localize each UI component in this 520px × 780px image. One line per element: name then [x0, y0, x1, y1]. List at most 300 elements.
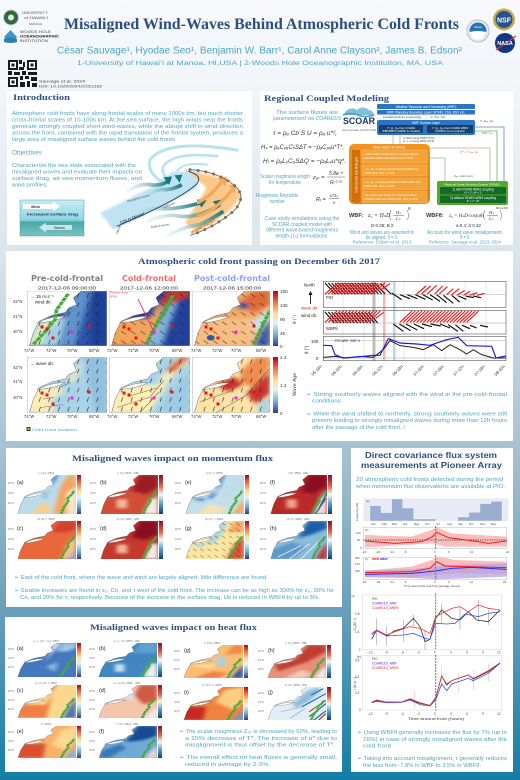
WW3 orange box: Wave Watch III (WW3): [373, 146, 405, 150]
flux chart labels: 0.4: [355, 675, 360, 679]
heat map titles: -T* (%), WBFθ - WBF: [116, 723, 139, 726]
cyclone illustration: Aligned waves: [150, 222, 170, 229]
momentum map ticks: 42°N: [260, 482, 266, 485]
map axis labels: 72°W: [128, 414, 138, 419]
QR code: [8, 60, 37, 87]
bullet text: wind and waves: ➢ While the wind shifted to northerly, strong southerly waves were still: [306, 412, 507, 418]
heat map ticks: 42°N: [89, 731, 95, 734]
logo: NSF: NSF: [497, 18, 512, 24]
intro paragraph: Atmospheric cold fronts have along-frontal scales of many 1000s km, but much shorter: [12, 111, 243, 117]
WRF boxes: [377, 104, 494, 178]
map: e: [186, 475, 244, 514]
WBF equation: B: [408, 206, 411, 211]
WRF boxes: τ*, Qₛ, Qₗₐ from COARE WBFθ: [432, 126, 469, 130]
map axis labels: 68°W: [172, 414, 182, 419]
WBF theta note: Account for wind wave misalignment,: [427, 230, 503, 236]
colorbar: wind-wave angle: 135: [280, 303, 288, 308]
drag chart labels: -12: [368, 650, 373, 654]
map axis labels: 70°W: [231, 414, 241, 419]
cold front count text: when momentum flux observations are available at PIO.: [355, 484, 505, 490]
chart labels: PIO: [326, 295, 334, 300]
colorbar: wave age: Wave Age: [292, 373, 298, 396]
map: heat i: [184, 687, 243, 720]
intro paragraph: across the front, combined with the rapid translation of the frontal system, produces a: [12, 130, 244, 136]
WW3 orange box: Unstructured and Multi-grid: [354, 157, 358, 193]
map axis labels: 68°W: [256, 414, 266, 419]
flux chart labels: -6: [401, 712, 404, 716]
observation points: [40, 324, 256, 406]
heat map ticks: 42°N: [89, 648, 95, 651]
composite axis labels: wave: [379, 557, 388, 561]
wind wave box: Increased surface drag: [27, 212, 78, 216]
drag chart labels: 1.4: [355, 630, 360, 634]
composite axis labels: -18: [376, 550, 380, 554]
composite axis labels: 0: [434, 550, 436, 554]
bullet text: direct flux: ➢ Using WBFθ generally increases the flux by 7% (up to: [357, 730, 507, 736]
WBF note: [350, 230, 414, 244]
drag chart labels: -6: [401, 650, 404, 654]
ROMS green box: dᵀ = 1°; dᵂ = 1°: [464, 190, 482, 194]
objectives heading: Objectives: [12, 150, 42, 156]
chart time axis: 07-18h: [473, 363, 486, 377]
heat map ticks: 40°N: [174, 710, 180, 713]
momentum map ticks: 40°N: [90, 548, 96, 551]
momentum map titles: Uᴅ (ms⁻¹), WBFθ: [205, 518, 224, 521]
pointer: Pioneer Array: [138, 299, 153, 330]
heat map ticks: 41°N: [89, 740, 95, 743]
case study text: length (z₀) formulations:: [276, 234, 329, 240]
heat map ticks: 42°N: [258, 650, 264, 653]
composite axis labels: -12: [390, 580, 394, 584]
map: h: [270, 521, 327, 559]
heading: regional coupled modeling: Regional Coupled Modeling: [264, 94, 390, 103]
composite axis labels: 0: [360, 546, 362, 550]
WBF equation: Hₛ: [395, 210, 401, 215]
flux chart labels: COARE3.5_WBFθ: [372, 666, 399, 670]
map: a: [18, 475, 76, 514]
Reynolds label: [256, 193, 298, 205]
composite axis labels: 0: [434, 580, 436, 584]
column heading: post-cold-frontal: Post-cold-frontal: [194, 274, 270, 283]
chart time axis: 07-12h: [452, 363, 465, 377]
scalar roughness equation: z₀ₜ =: [312, 175, 325, 181]
colorbar: wave age: 1.2: [280, 383, 287, 388]
momentum map ticks: 41°N: [8, 538, 14, 541]
heat map ticks: 40°N: [8, 666, 14, 669]
heat colorbars: [77, 643, 331, 758]
chart labels: WBF θ: [350, 339, 360, 343]
map: heat j: [268, 687, 326, 720]
surface flux intro: parameterized via COARE3.5: [273, 116, 341, 122]
histogram labels: Jan: [371, 522, 376, 526]
map axis labels: 40°N: [13, 395, 22, 400]
WW3 orange box: - Hₛ, wave and angle on z using modified: [364, 193, 417, 197]
chart labels: WBFθ: [326, 326, 338, 331]
composite axis labels: 6: [448, 550, 450, 554]
timestamps: [38, 286, 262, 290]
Reynolds equation: [316, 193, 339, 205]
histogram labels: Mar: [392, 522, 397, 526]
column heading: cold-frontal: Cold-frontal: [122, 274, 176, 283]
WW3 orange box: - Cₚ, Hₛ, z using original Charnly WBF and: [364, 167, 419, 171]
bullet text: heat: ➢ The scalar roughness Z₀ₜ is decreased by 60%, leading to: [179, 729, 337, 735]
heat panel letters: (g): [184, 648, 191, 654]
chart labels: 100: [311, 339, 319, 344]
heat map titles: -T*, WBFθ: [40, 723, 52, 726]
drag chart labels: 1: [359, 648, 361, 652]
histogram labels: Jun: [425, 522, 430, 526]
heading: direct covariance: Direct covariance flux system: [365, 450, 497, 460]
colorbar: wind-wave angle: 45: [280, 331, 286, 336]
intro paragraph: cross-frontal scales of 10-100s km. At the sea surface, the high winds near the fronts: [12, 118, 243, 124]
cold front count text: [355, 477, 505, 490]
drag chart labels: Cₚ[10⁻³]: [353, 618, 357, 630]
momentum map ticks: 40°N: [175, 548, 181, 551]
map: wind speed frontal: [109, 291, 190, 346]
scalar roughness label: Scalar roughness length: [260, 174, 310, 180]
momentum panel letters: (d): [100, 526, 107, 532]
flux chart labels: -9: [385, 712, 388, 716]
map axis labels: 70°W: [231, 348, 241, 353]
composite axis labels: 180: [355, 569, 360, 573]
WRF boxes: Weather Research and Forecasting (WRF): [396, 105, 456, 109]
Reynolds label: number: [270, 199, 285, 205]
Reynolds label: Roughness Reynolds: [256, 193, 298, 199]
WRF boxes: σ², Ūss, Ūss: [430, 115, 446, 119]
panel: atmospheric cold front: [6, 251, 513, 441]
flux chart labels: [353, 655, 501, 721]
column heading: pre-cold-frontal: Pre-cold-frontal: [31, 274, 103, 283]
map annotations: → wave dir.: [30, 361, 54, 366]
WBF theta equation: Lₚ: [488, 216, 494, 221]
chart: direction time series: [301, 281, 506, 377]
momentum map ticks: 40°N: [8, 548, 14, 551]
citation: [39, 80, 102, 88]
flux chart labels: 6: [466, 712, 468, 716]
objectives text: wind profiles.: [11, 182, 48, 188]
WBF theta equation: a:0.4; b:0.32: [456, 223, 482, 228]
histogram labels: Nov: [480, 522, 486, 526]
drag chart labels: 9: [482, 650, 484, 654]
composite axis labels: 270: [355, 562, 360, 566]
flux chart labels: PIO: [372, 657, 378, 661]
histogram labels: Dec: [491, 522, 497, 526]
cyclone illustration: L: [186, 167, 189, 172]
panel: heat flux: [5, 617, 342, 772]
map: heat f: [98, 726, 157, 758]
wind wave box: [20, 200, 84, 236]
logo: University of Hawaii: of HAWAIʻI: [24, 15, 48, 20]
WBF theta equation: WBFθ:: [426, 213, 444, 219]
bullet text: heat: a 15% decrease of T*. The increase of u* due to: [185, 736, 337, 742]
flux chart labels: (e): [357, 655, 361, 659]
bullet text: momentum: Cᴅ, and 20% for τ, respectively. Because of the increase in the surface drag, Uᴅ is reduced in WBFθ by up to 5%.: [20, 595, 320, 601]
case study text: different wave-based roughness: [266, 228, 338, 234]
WRF boxes: WRF Surface Layer: [412, 121, 441, 125]
logo: University of Hawaii: [4, 10, 49, 26]
composite axis labels: (b): [365, 528, 368, 532]
momentum map ticks: 40°N: [175, 502, 181, 505]
WRF boxes: τ*, Qₛ, Qₗₐ from COARE: [387, 126, 415, 130]
chart time axis: 07-06h: [432, 363, 445, 377]
composite axis labels: 360: [355, 556, 360, 560]
ROMS green box: Regional Ocean Modeling System (ROMS): [444, 182, 500, 186]
map: g: [186, 521, 244, 559]
colorbar: wave age: [273, 355, 298, 416]
drag chart labels: 6: [466, 650, 468, 654]
logo: WHOI: [4, 30, 60, 43]
map annotations: → 15 m.s⁻¹: [30, 294, 54, 299]
logo: NASA: [495, 33, 516, 53]
WW3 orange box: - Stochastic Coefficient on z using original: [364, 152, 418, 156]
heat panel letters: (b): [99, 646, 106, 652]
momentum panel letters: (e): [185, 480, 192, 486]
heat map ticks: 42°N: [174, 692, 180, 695]
heat panel letters: (c): [17, 688, 23, 694]
bullet text: direct flux: the bias from -7.8% in WBF to 3.5% in WBFθ.: [363, 763, 481, 769]
colorbar: wind-wave angle: θ (°): [292, 314, 297, 324]
title: Misaligned Wind-Waves Behind Atmospheric Cold Fronts: [64, 16, 459, 33]
cold front count text: 20 atmospheric cold fronts detected during the period: [356, 477, 503, 483]
momentum map ticks: 41°N: [90, 538, 96, 541]
heading: momentum flux: Misaligned waves impact on momentum flux: [72, 453, 274, 463]
heat map ticks: 41°N: [258, 701, 264, 704]
heading: cold front passing: Atmospheric cold front passing on December 6th 2017: [138, 257, 380, 266]
WRF boxes: WBF/WBFθ (HWRF is coupled): [382, 129, 420, 133]
WW3 orange box: [349, 144, 430, 204]
drag chart labels: -3: [417, 650, 420, 654]
surface flux intro: [273, 110, 341, 122]
map axis labels: 42°N: [13, 299, 22, 304]
heat panel letters: [17, 646, 275, 735]
cyclone illustration: 1000s km: [162, 201, 176, 210]
heat map ticks: 41°N: [8, 699, 14, 702]
objectives text: Characterize the sea state associated with the: [12, 163, 136, 169]
logo: University of Hawaii: MĀNOA: [29, 23, 43, 26]
composite axis labels: 12: [470, 550, 474, 554]
WRF boxes: Rₙₒ, bathymetry: [454, 174, 474, 178]
bullet text: heat: [179, 729, 338, 768]
flux chart labels: 0: [434, 712, 436, 716]
bullet text: heat: misalignment is thus offset by the decrease of T*.: [185, 742, 336, 748]
WBF theta equation: Hₛ: [488, 210, 494, 215]
logo: NSF: [493, 8, 515, 30]
chart: monthly histogram: [363, 498, 508, 521]
logo: NASA: NASA: [497, 41, 513, 47]
map axis labels: 72°W: [212, 414, 222, 419]
bullet text: wind and waves: present leading to strongly misaligned waves during more than 12h hours: [312, 418, 507, 424]
bulk formula equations: Hₛ = ρₐCₚₐCₕSΔT = −ρₐCₚₐu*T*,: [261, 144, 344, 151]
ROMS green box: 1) with ROMS-WW3 coupling: [452, 188, 494, 192]
WRF boxes: or u, U using WW3 (ST4): [403, 139, 434, 143]
drag chart labels: [352, 594, 501, 654]
heat panel letters: (i): [184, 690, 189, 696]
heat map ticks: 41°N: [258, 659, 264, 662]
histogram labels: [355, 499, 497, 526]
histogram labels: Apr: [403, 522, 407, 526]
WW3 orange box: COARE WBF and WW3 ST2, ST4 or ST6: [364, 197, 418, 201]
histogram labels: Frequency (%): [355, 503, 359, 521]
composite axis labels: -6: [404, 580, 407, 584]
objectives text: misaligned waves and evaluate their impacts on: [12, 170, 142, 176]
momentum map ticks: 41°N: [175, 538, 181, 541]
momentum map ticks: 40°N: [260, 548, 266, 551]
WBF note: Reference: Edson et al. 2013: [352, 240, 412, 244]
scalar roughness equation: Rᵣ⁰·⁷²: [330, 180, 342, 186]
histogram labels: Feb: [382, 522, 387, 526]
WBF theta note: Reference: Sauvage et al. 2023, 2024: [429, 240, 502, 244]
colorbar: wave age: 2.4: [280, 355, 287, 360]
heat map ticks: 40°N: [89, 749, 95, 752]
map: heat c: [18, 685, 76, 718]
momentum map ticks: 41°N: [260, 538, 266, 541]
momentum map titles: z₀ (%), WBFθ - WBF: [117, 472, 140, 475]
momentum map titles: Cᴅ (%), WBFθ - WBF: [117, 518, 140, 521]
chart: momentum flux time series: [362, 655, 502, 711]
chart: wind speed composite: [363, 526, 507, 550]
momentum map titles: Uᴅ (%), WBFθ - WBF: [287, 518, 310, 521]
map: wave age frontal: [109, 357, 190, 413]
bullet text: momentum: [14, 575, 334, 601]
citation: DOI: 10.1029/2024JC021162: [39, 84, 102, 88]
chart labels: 0: [316, 356, 319, 361]
map axis labels: 74°W: [191, 414, 201, 419]
logo: University of Hawaii: UNIVERSITY: [22, 11, 49, 15]
composite axis labels: -24: [362, 580, 366, 584]
momentum map ticks: 41°N: [260, 492, 266, 495]
colorbar: wind-wave angle: 0: [280, 344, 283, 349]
WBF equation: Lₚ: [395, 216, 401, 221]
momentum map ticks: 42°N: [90, 482, 96, 485]
map axis labels: 72°W: [46, 414, 56, 419]
drag chart labels: -9: [385, 650, 388, 654]
WBF theta note: [427, 230, 503, 244]
bullet text: wind and waves: conditions: [312, 398, 341, 404]
momentum map titles: τ (%), WBFθ - WBF: [288, 472, 309, 475]
WBF equation: D:0.09; B:2: [371, 223, 394, 228]
case study text: Case study simulations using the: [264, 216, 340, 222]
heat map ticks: 40°N: [258, 668, 264, 671]
map: c: [18, 521, 76, 559]
map: d: [100, 521, 158, 559]
case study text: [264, 216, 340, 240]
WW3 orange box: WW3 ST2, ST4, or ST6: [364, 171, 395, 175]
timestamps: 2017-12-06 12:00:00: [120, 286, 179, 290]
flux chart labels: 3: [450, 712, 452, 716]
heading: heat flux: Misaligned waves impact on heat flux: [90, 622, 258, 632]
composite axis labels: wind: [371, 557, 379, 561]
heat map ticks: 42°N: [174, 650, 180, 653]
momentum map ticks: 41°N: [8, 492, 14, 495]
composite axis labels: -6: [404, 550, 407, 554]
chart time axis: 06-12h: [371, 363, 384, 377]
histogram labels: Sep: [458, 522, 463, 526]
WBF equation: [349, 206, 411, 228]
flux chart labels: 12: [497, 712, 501, 716]
WRF boxes: σᵂ, σᵀ, Fₙₒ, Hₛ: [460, 150, 478, 154]
momentum map titles: [37, 472, 310, 521]
composite axis labels: -12: [390, 550, 394, 554]
map axis labels: 68°W: [172, 348, 182, 353]
WRF boxes: WRF Planetary Boundary Layer: MYNN, YSU, MYJ etc.: [387, 110, 465, 114]
map axis labels: [13, 299, 266, 419]
heat map ticks: 40°N: [89, 708, 95, 711]
momentum map titles: τ (N.m⁻²), WBFθ: [205, 472, 223, 475]
flux chart labels: 0.2: [355, 691, 360, 695]
momentum panel letters: [17, 480, 277, 532]
heading: introduction: Introduction: [13, 93, 71, 102]
flux chart labels: 0.6: [355, 658, 360, 662]
timestamps: 2017-12-06 15:00:00: [203, 286, 262, 290]
bullet text: momentum: ➢ Sizable increases are found in z₀, Cᴅ, and τ west of the cold front. The increase can be as high as 300% for z₀, 30% for: [14, 588, 334, 594]
ROMS green box: 2) without ROMS-WW3 coupling: [450, 196, 496, 200]
heading: direct covariance: [361, 450, 502, 470]
composite axis labels: -24: [362, 550, 366, 554]
colorbar: wind-wave angle: [273, 289, 297, 349]
chart time axis: 07-00h: [412, 363, 425, 377]
bullet text: direct flux: cold front: [363, 744, 392, 750]
map annotations: Pioneer Array: [110, 290, 129, 294]
SCOAR logo: [342, 108, 376, 132]
chart: drag coefficient: [362, 593, 502, 650]
map: heat a: [18, 643, 76, 677]
heat map ticks: 41°N: [174, 659, 180, 662]
SCOAR logo: www.hyodae.seo/SCOAR: [342, 128, 376, 132]
momentum panel letters: (c): [17, 526, 23, 532]
momentum map ticks: 40°N: [260, 502, 266, 505]
Reynolds equation: ν: [333, 200, 336, 205]
map axis labels: 41°N: [13, 314, 22, 319]
flux chart labels: 9: [482, 712, 484, 716]
bullet text: heat: ➢ The overall effect on heat fluxes is generally small,: [179, 755, 338, 761]
map axis labels: 74°W: [24, 414, 34, 419]
heat map ticks: 40°N: [8, 708, 14, 711]
heat map titles: u* (m/s), WBFθ: [204, 642, 221, 645]
drag chart labels: (d): [352, 594, 355, 598]
momentum panel letters: (h): [270, 526, 277, 532]
momentum map ticks: 42°N: [90, 528, 96, 531]
WW3 orange box: - Cₚ, Hₛ, z using modified COARE WBF and: [364, 180, 421, 184]
WBF note: Wind and waves are assumed to: [350, 230, 414, 236]
objectives text: surface drag, air-sea momentum fluxes, and: [12, 176, 142, 182]
drag chart labels: 1.8: [355, 612, 360, 616]
intro paragraph: generate strongly coupled short wind-waves, while the abrupt shift in wind direction: [12, 124, 243, 130]
bulk formula equations: Hₗ = ρₐLᵥCₑSΔQ = −ρₐLᵥu*q*.: [263, 158, 346, 165]
bulk formula equations: [261, 130, 346, 165]
map axis labels: 68°W: [89, 414, 99, 419]
wind wave box: Wind: [31, 205, 40, 209]
momentum map ticks: 41°N: [90, 492, 96, 495]
momentum map ticks: 42°N: [175, 482, 181, 485]
map annotations: [30, 290, 129, 366]
heat map titles: Cₕ, Cq (%), WBFθ - WBF: [114, 682, 141, 685]
momentum panel letters: (b): [100, 480, 107, 486]
map axis labels: 72°W: [128, 348, 138, 353]
momentum map ticks: 40°N: [8, 502, 14, 505]
momentum map titles: z₀ (mm), WBFθ: [38, 472, 55, 475]
heading: direct covariance: measurements at Pioneer Array: [361, 460, 502, 470]
momentum map ticks: 42°N: [8, 528, 14, 531]
WBF equation: WBF:: [349, 213, 364, 219]
cyclone illustration: 100s km: [115, 224, 122, 235]
map axis labels: 68°W: [89, 348, 99, 353]
WRF boxes: SST, Uₛₜ: [482, 131, 493, 135]
bullet text: direct flux: 16%) in case of strongly misaligned waves after the: [363, 737, 507, 743]
histogram labels: Jul: [436, 522, 440, 526]
map axis labels: 70°W: [149, 348, 159, 353]
heat map ticks: 42°N: [89, 690, 95, 693]
heat map ticks: 41°N: [8, 740, 14, 743]
